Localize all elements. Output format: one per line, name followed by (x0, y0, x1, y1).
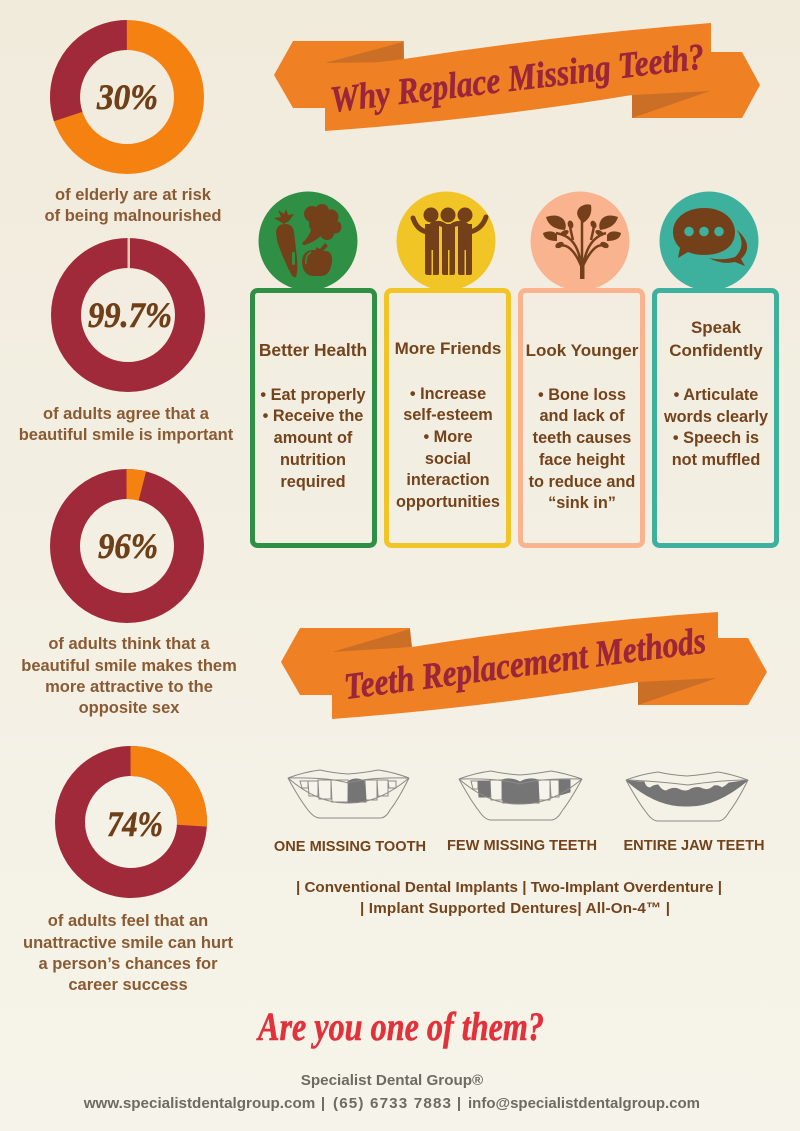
benefit: better health (252, 192, 374, 546)
benefit: look younger: teeth causes (533, 429, 631, 447)
benefit: more friends: • More (423, 428, 473, 446)
caption: 96%: opposite sex (79, 699, 180, 717)
benefit: speak confidently: Confidently (669, 341, 763, 360)
benefit: look younger: face height (539, 451, 626, 469)
benefit: look younger: Look Younger (526, 341, 639, 360)
panel: replacement methods (274, 770, 765, 917)
caption: 30%: of being malnourished (45, 207, 221, 225)
benefit: better health: • Receive the (263, 407, 363, 425)
benefit: better health: • Eat properly (260, 386, 366, 404)
illustration: few missing teeth (459, 771, 582, 820)
caption: 74%: of adults feel that an (48, 912, 208, 930)
benefit: look younger: to reduce and (529, 473, 635, 491)
footer: contact details: (65) 6733 7883 (333, 1095, 451, 1112)
illustration: one missing tooth (288, 770, 409, 818)
benefit: more friends: social (425, 450, 471, 468)
caption: 74%: a person’s chances for (38, 955, 218, 973)
panel: donut statistics (19, 19, 237, 994)
benefit: look younger: “sink in” (548, 494, 616, 512)
benefit: better health: amount of (274, 429, 353, 447)
label: entire jaw teeth: ENTIRE JAW TEETH (623, 838, 765, 854)
benefit: speak confidently: • Articulate (674, 386, 758, 404)
card: better health (252, 290, 374, 546)
title: why replace: Why Replace Missing Teeth? (328, 36, 706, 121)
footer: contact details: | (321, 1095, 325, 1112)
donut: 96% (65, 484, 189, 608)
donut: 74% (70, 761, 192, 883)
text: treatment options: | Conventional Dental Implants | Two-Implant Overdenture | (296, 879, 722, 896)
benefit: more friends: opportunities (396, 493, 500, 511)
benefit: look younger: • Bone loss (538, 386, 626, 404)
title: teeth replacement methods: Teeth Replacement Methods (342, 620, 708, 708)
benefit: more friends (386, 192, 508, 546)
label: one missing tooth: ONE MISSING TOOTH (274, 839, 426, 855)
benefit: more friends: More Friends (395, 339, 501, 358)
footer: contact details: Specialist Dental Group® (301, 1072, 483, 1089)
benefit: better health: nutrition (280, 451, 346, 469)
icon: speech bubbles (660, 192, 758, 290)
banner: Teeth Replacement Methods (281, 612, 767, 719)
benefit: more friends: interaction (406, 471, 490, 489)
benefit: better health: required (280, 473, 346, 491)
footer: contact details: www.specialistdentalgroup.com (83, 1095, 315, 1112)
benefit: look younger: and lack of (539, 407, 625, 425)
caption: 96%: of adults think that a (48, 635, 210, 653)
icon: three friends (396, 192, 496, 290)
caption: 96%: beautiful smile makes them (21, 657, 237, 675)
benefit: more friends: • Increase (410, 385, 486, 403)
caption: 74%: career success (68, 976, 188, 994)
benefit: more friends: self-esteem (403, 406, 493, 424)
footer: contact details: info@specialistdentalgroup.com (468, 1095, 700, 1112)
donut: 30%: 30% (96, 77, 158, 117)
benefit: look younger (520, 192, 642, 546)
icon: plant (530, 192, 630, 290)
benefit: better health: Better Health (259, 340, 367, 360)
footer: contact details: | (457, 1095, 461, 1112)
call to action: Are you one of them? (256, 1004, 544, 1049)
label: few missing teeth: FEW MISSING TEETH (447, 838, 597, 854)
benefit: speak confidently: words clearly (663, 408, 768, 426)
caption: 74%: unattractive smile can hurt (23, 934, 233, 952)
benefit: speak confidently: not muffled (672, 451, 760, 469)
caption: 99.7%: of adults agree that a (43, 405, 210, 423)
benefit: speak confidently: • Speech is (673, 429, 759, 447)
card: more friends (386, 290, 508, 546)
banner: Why Replace Missing Teeth? (274, 23, 760, 131)
text: treatment options: | Implant Supported Dentures| All-On-4™ | (360, 900, 670, 917)
illustration: entire jaw teeth (626, 772, 748, 821)
donut: 96%: 96% (98, 526, 158, 566)
footer: contact details (83, 1072, 700, 1112)
benefit: speak confidently (654, 192, 776, 546)
caption: 99.7%: beautiful smile is important (19, 426, 234, 444)
donut: 30% (49, 19, 205, 175)
icon: vegetables (258, 192, 358, 290)
donut: 99.7%: 99.7% (88, 295, 172, 335)
benefit: speak confidently: Speak (691, 318, 742, 337)
caption: 30%: of elderly are at risk (55, 186, 212, 204)
text: treatment options (296, 879, 722, 917)
card: look younger (520, 290, 642, 546)
donut: 99.7% (66, 238, 190, 377)
panel: benefits (252, 192, 776, 546)
caption: 96%: more attractive to the (45, 678, 213, 696)
card: speak confidently (654, 290, 776, 546)
donut: 74%: 74% (107, 804, 163, 844)
